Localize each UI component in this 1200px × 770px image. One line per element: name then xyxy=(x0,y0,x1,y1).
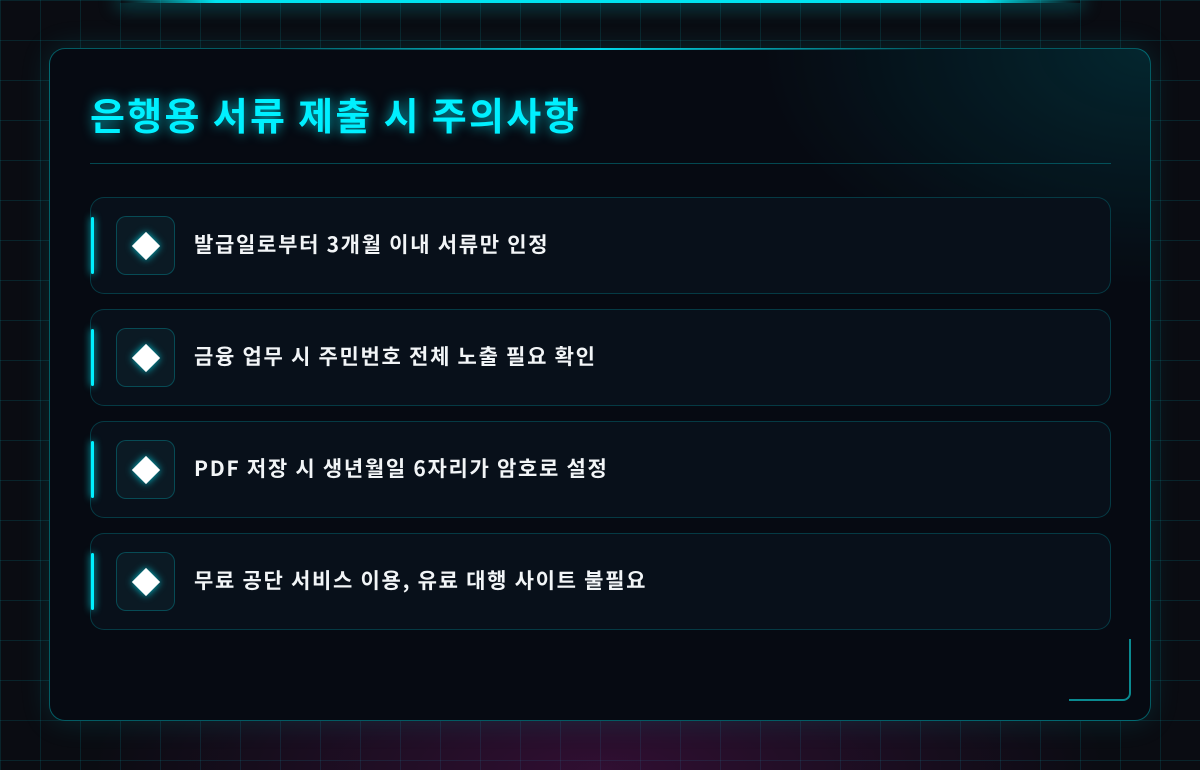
corner bracket xyxy=(1069,639,1131,701)
item 2 xyxy=(90,309,1111,406)
item 1: 발급일로부터 3개월 이내 서류만 인정 xyxy=(194,229,549,259)
title: 은행용 서류 제출 시 주의사항 xyxy=(90,86,581,141)
item 1 xyxy=(90,197,1111,294)
item 2: 금융 업무 시 주민번호 전체 노출 필요 확인 xyxy=(194,341,597,371)
item 3 xyxy=(90,421,1111,518)
item 4 xyxy=(90,533,1111,630)
item 4: 무료 공단 서비스 이용, 유료 대행 사이트 불필요 xyxy=(194,565,647,595)
item 3: PDF 저장 시 생년월일 6자리가 암호로 설정 xyxy=(194,453,609,483)
